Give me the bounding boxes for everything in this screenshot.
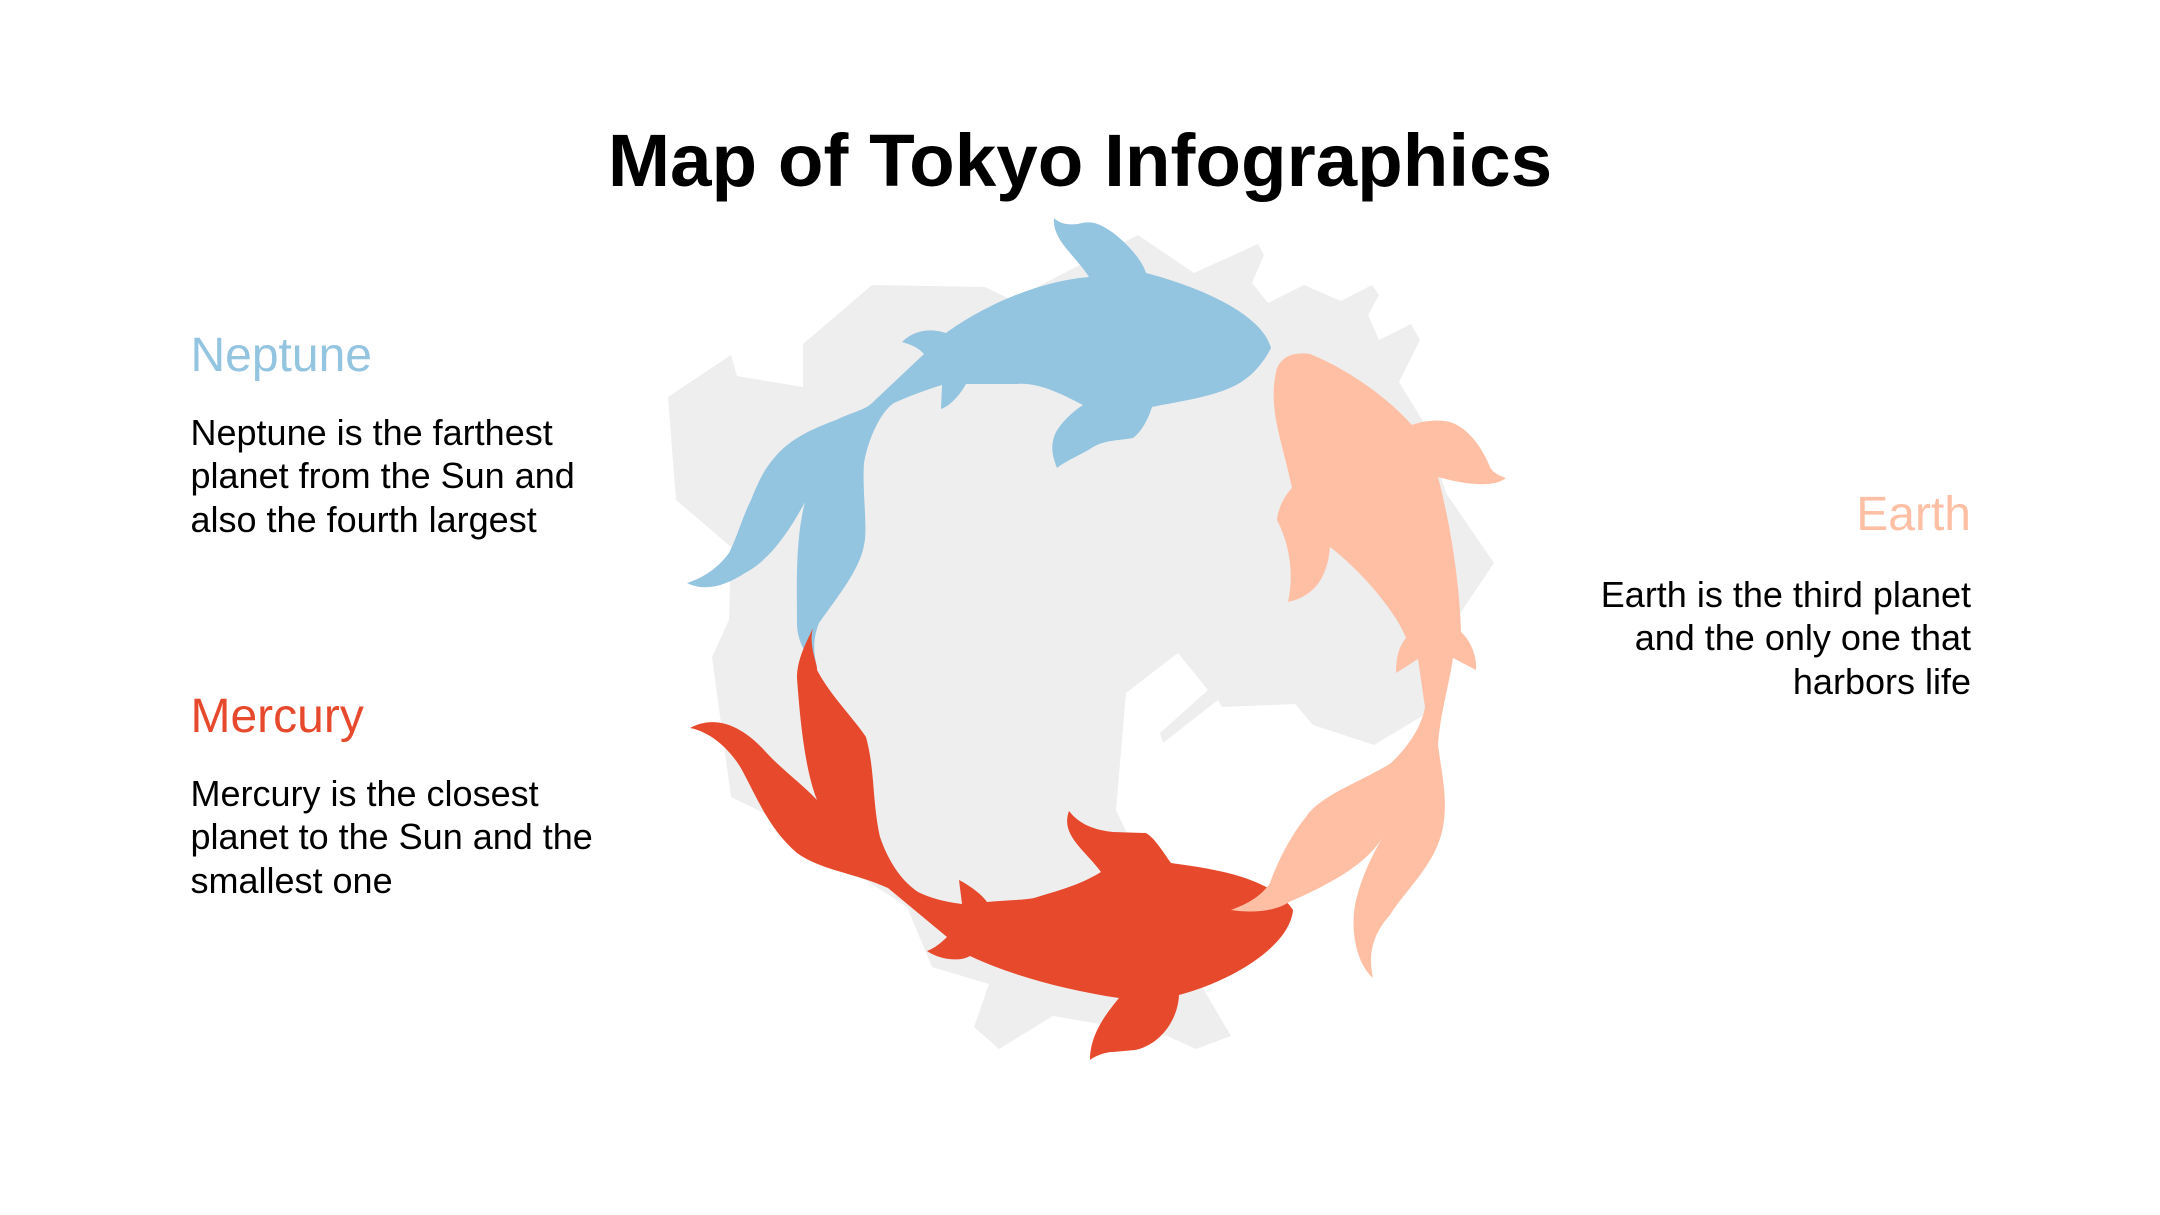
description: Neptune <box>190 412 575 540</box>
title: Map of Tokyo Infographics <box>608 118 1552 202</box>
text block: Mercury <box>190 690 593 901</box>
description: Earth <box>1601 574 1971 702</box>
text block: Earth <box>1601 488 1971 702</box>
description: Mercury: smallest one <box>190 860 393 901</box>
fish: red (Mercury) <box>690 628 1293 1060</box>
fish: peach (Earth) <box>1231 353 1506 978</box>
description: Earth: and the only one that <box>1635 617 1971 658</box>
map of Tokyo silhouette <box>668 235 1494 1049</box>
fish: blue (Neptune) <box>687 218 1271 667</box>
description: Earth: harbors life <box>1793 661 1971 702</box>
description: Neptune: planet from the Sun and <box>190 455 575 496</box>
description: Neptune: Neptune is the farthest <box>190 412 553 453</box>
description: Earth: Earth is the third planet <box>1601 574 1971 615</box>
heading: Mercury: Mercury <box>190 690 364 743</box>
description: Neptune: also the fourth largest <box>190 499 537 540</box>
heading: Neptune: Neptune <box>190 329 372 382</box>
heading: Earth: Earth <box>1856 488 1971 541</box>
description: Mercury: Mercury is the closest <box>190 773 539 814</box>
description: Mercury: planet to the Sun and the <box>190 816 593 857</box>
description: Mercury <box>190 773 593 901</box>
text block: Neptune <box>190 329 575 540</box>
